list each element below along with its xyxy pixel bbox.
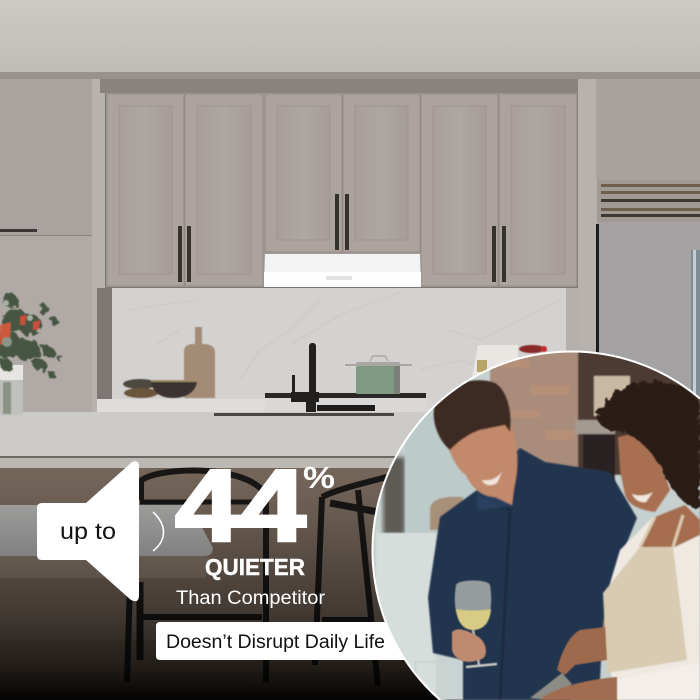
apron [603,547,687,673]
bowls [123,379,197,398]
central wall cabinets [106,93,577,287]
callout: doesn't disrupt daily life [156,622,406,660]
book [472,345,518,378]
headline 44 percent: % [303,460,335,495]
upper cabinets left [0,79,112,412]
back counter [97,399,265,413]
woman's hands and knife [530,627,617,700]
wine glass [455,580,497,667]
callout: doesn't disrupt daily life: Doesn’t Disrupt Daily Life [166,632,385,653]
marble backsplash [112,288,566,400]
cooktop range [265,393,486,413]
island countertop [0,412,480,469]
face [618,430,670,512]
green pot [345,356,412,394]
sound wave arc [153,512,164,551]
than competitor label: Than Competitor [176,588,326,609]
white range hood [264,254,421,287]
shirt [428,448,637,700]
cabinet handles [178,117,695,282]
red flowers on the counter [519,345,547,353]
white top [605,517,700,700]
QUIETER label: QUIETER [205,554,305,580]
ceiling [0,0,700,73]
speaker icon with up to label: up to [60,518,116,544]
face and neck [448,419,517,505]
right filler and cabinet [566,79,700,400]
headline 44 percent: 44 [175,449,306,563]
woman [603,430,700,700]
dark gradient overlay [0,470,700,700]
hair [434,380,511,450]
neck [640,505,700,547]
curly hair [598,380,700,510]
island wood front [0,468,480,643]
black faucet [291,343,319,418]
floor [0,640,480,700]
man's hand [452,629,486,662]
photo background [370,345,700,700]
black stools [127,470,390,686]
photo circle: couple cooking [370,345,700,700]
recessed cabinet header [100,79,582,93]
circle white outline [372,352,700,700]
flower bouquet and vase [0,293,63,415]
sleeve [617,663,700,700]
speaker icon with up to label [37,461,139,601]
cutting board [184,327,215,398]
light bench [0,505,213,578]
man [428,380,637,700]
stainless refrigerator [596,180,700,400]
